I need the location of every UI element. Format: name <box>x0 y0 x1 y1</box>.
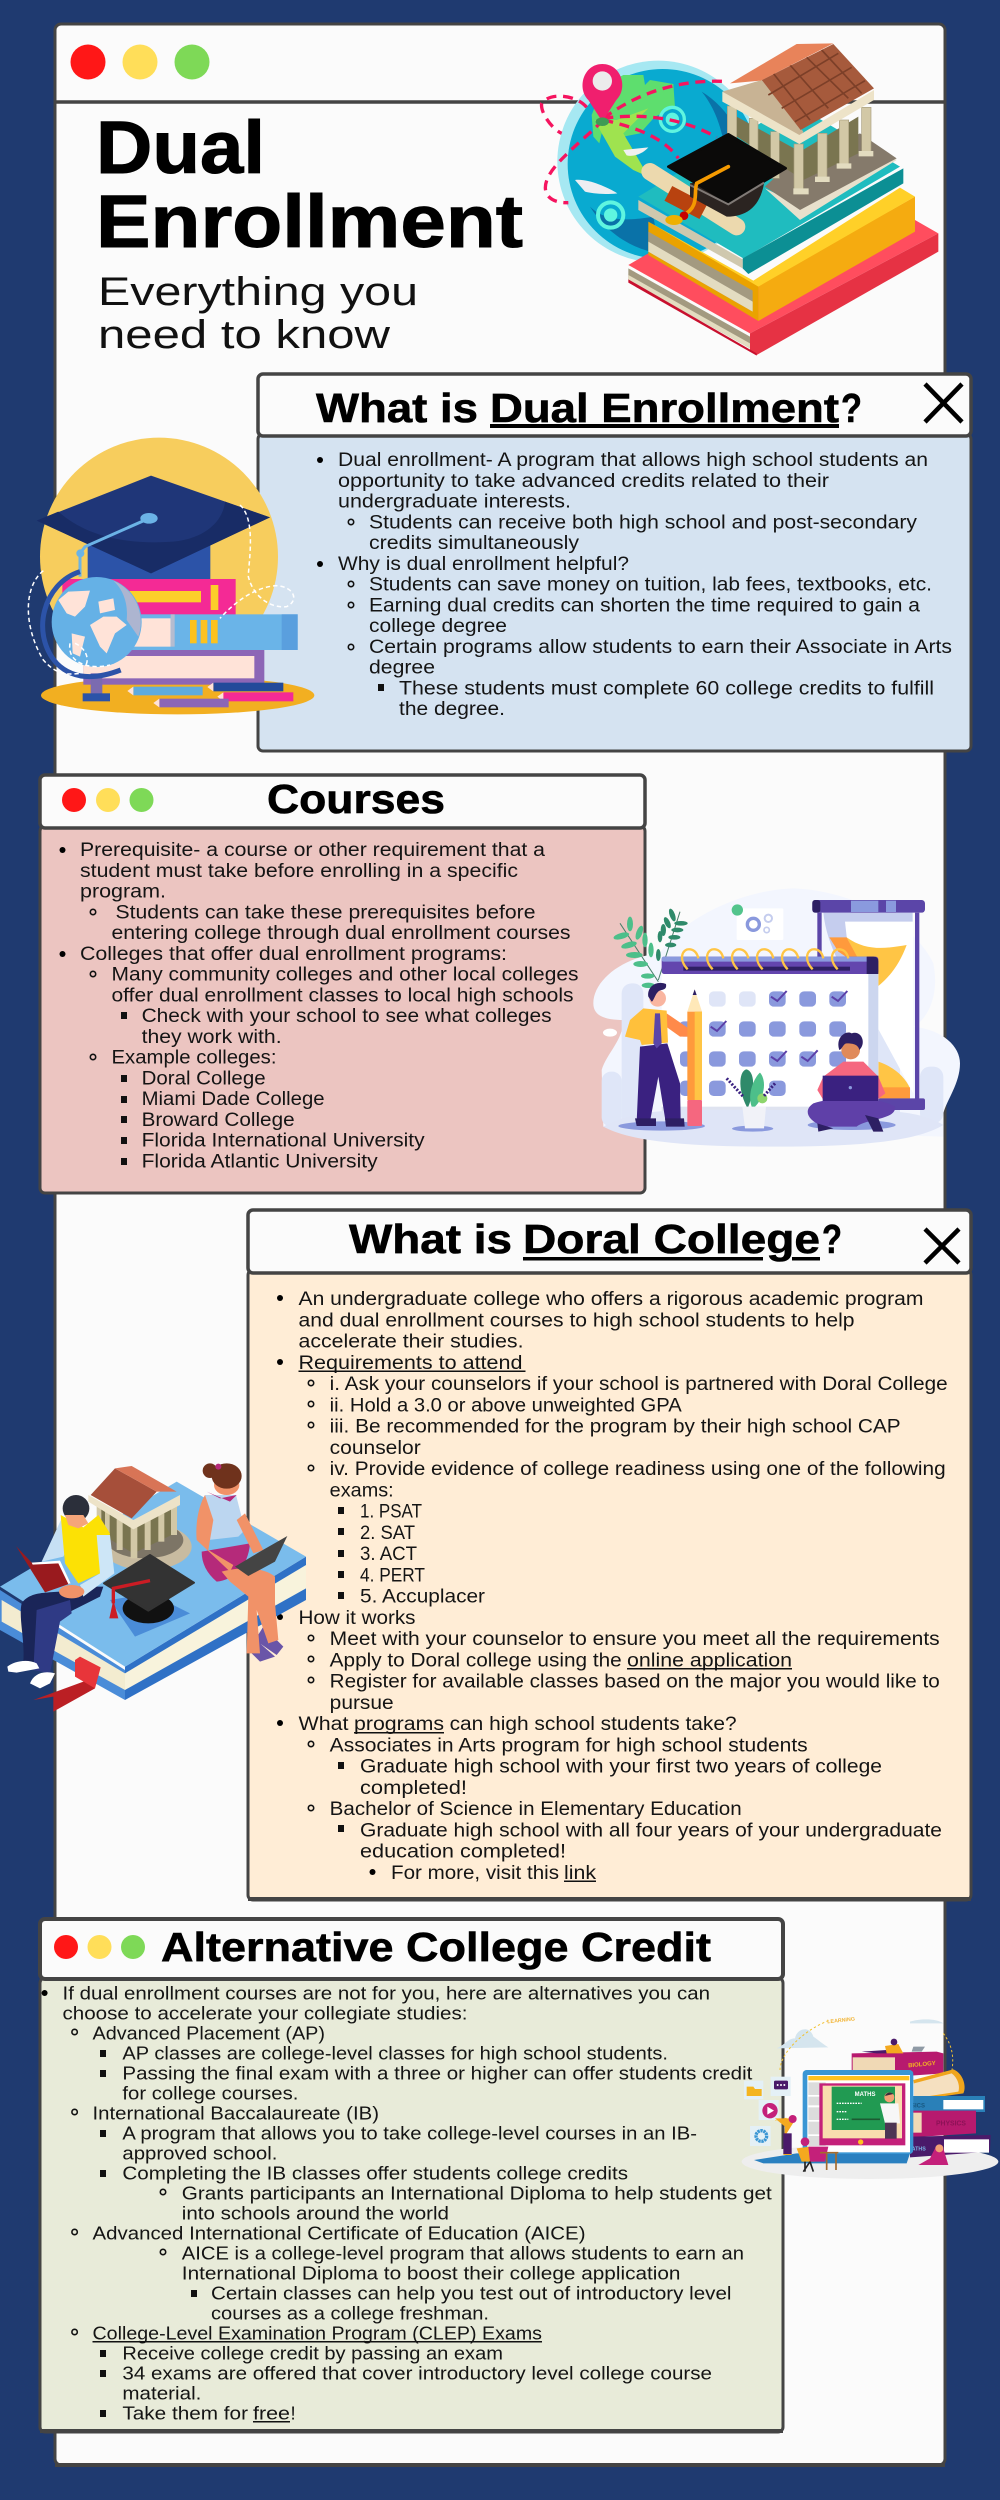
large book <box>0 1482 306 1700</box>
online learning label: LEARNING <box>827 2016 855 2025</box>
stacked books: PHYSICS <box>936 2118 966 2127</box>
heading box <box>40 1919 783 1979</box>
text block: alternatives: into schools around the world <box>182 2202 449 2223</box>
text block: doral college: What <box>298 1714 349 1735</box>
title <box>96 106 523 263</box>
bookmark <box>33 1657 101 1712</box>
heading box: Alternative College Credit <box>161 1924 711 1970</box>
text block: doral college: Graduate high school with all four years of your undergraduate <box>360 1820 942 1841</box>
text block: alternatives <box>42 1982 772 2423</box>
subtitle: Everything you <box>98 270 418 314</box>
window dots: courses <box>62 788 154 812</box>
text block: doral college <box>277 1289 948 1884</box>
illustration: students on a book <box>0 1463 306 1712</box>
heading box: Doral College <box>523 1216 820 1262</box>
dashed flight paths <box>28 505 294 674</box>
red book <box>628 220 938 356</box>
text block: courses: Broward College <box>142 1110 295 1131</box>
text block: courses: they work with. <box>142 1027 282 1048</box>
text block: doral college: i. Ask your counselors if your school is partnered with Doral College <box>330 1374 948 1395</box>
text block: doral college: programs <box>354 1714 444 1735</box>
panel: alternative college credit <box>40 1919 783 2433</box>
text block: doral college: For more, visit this <box>391 1863 559 1884</box>
dashed routes <box>542 81 728 203</box>
plant <box>613 908 688 988</box>
text block: doral college: Register for available classes based on the major you would like to <box>330 1672 940 1692</box>
window dots: hero <box>70 44 210 80</box>
teal book <box>638 103 903 274</box>
text block: courses: Florida Atlantic University <box>142 1151 378 1172</box>
graduation cap and diploma <box>650 134 786 227</box>
man reading <box>7 1495 114 1688</box>
text block: alternatives: AP classes are college-level classes for high school students. <box>122 2042 668 2063</box>
graduation cap <box>37 476 270 577</box>
text block: alternatives: free <box>253 2402 290 2423</box>
text block: dual enrollment: Students can receive both high school and post-secondary <box>369 512 918 533</box>
text block: doral college: can high school students take? <box>450 1714 737 1735</box>
text block: dual enrollment: Certain programs allow students to earn their Associate in Arts <box>369 637 952 658</box>
text block: alternatives: choose to accelerate your collegiate studies: <box>62 2002 467 2023</box>
clouds <box>777 2019 943 2048</box>
text block: alternatives: College-Level Examination Program (CLEP) Exams <box>92 2322 542 2343</box>
stacked books <box>852 2052 991 2157</box>
text block: doral college: counselor <box>330 1438 421 1459</box>
text block: alternatives: Advanced International Certificate of Education (AICE) <box>92 2222 586 2243</box>
panel: what is doral college <box>248 1210 971 1901</box>
subtitle: need to know <box>98 313 390 357</box>
text block: dual enrollment: college degree <box>369 616 507 637</box>
heading box: ? <box>841 385 862 431</box>
text block: courses: Doral College <box>142 1068 266 1089</box>
text block: alternatives: courses as a college freshman. <box>211 2302 489 2323</box>
location pin <box>583 64 622 126</box>
stacked books: ATHS <box>912 2147 926 2153</box>
panel: courses <box>40 775 645 1193</box>
text block: alternatives: Grants participants an International Diploma to help students get <box>182 2182 772 2203</box>
text block: dual enrollment: These students must complete 60 college credits to fulfill <box>399 678 934 699</box>
text block: alternatives: Take them for <box>122 2402 248 2423</box>
tiny figures <box>775 2039 948 2172</box>
yellow book <box>648 188 915 321</box>
text block: courses: Students can take these prerequisites before <box>116 902 536 923</box>
woman with laptop <box>196 1463 287 1662</box>
text block: alternatives: 34 exams are offered that cover introductory level college course <box>122 2362 712 2383</box>
text block: doral college: iv. Provide evidence of college readiness using one of the following <box>330 1459 946 1480</box>
text block: doral college: Apply to Doral college using the <box>330 1650 622 1671</box>
text block: dual enrollment: undergraduate interests. <box>338 492 571 512</box>
window dots: alternative <box>54 1935 145 1959</box>
heading box: Courses <box>267 776 445 822</box>
text block: doral college: education completed! <box>360 1842 566 1862</box>
text block: dual enrollment: Dual enrollment- A program that allows high school students an <box>338 450 928 471</box>
text block: doral college: Graduate high school with your first two years of college <box>360 1756 882 1778</box>
text block: doral college: Associates in Arts program for high school students <box>330 1735 808 1756</box>
text block: alternatives: Completing the IB classes offer students college credits <box>122 2162 628 2183</box>
text block: alternatives: Receive college credit by passing an exam <box>122 2342 503 2363</box>
text block: alternatives: A program that allows you to take college-level courses in an IB- <box>122 2122 697 2143</box>
text block: doral college: 2. SAT <box>360 1523 415 1544</box>
text block: doral college: and dual enrollment courses to high school students to help <box>298 1310 854 1331</box>
text block: doral college: Meet with your counselor to ensure you meet all the requirements <box>330 1629 940 1650</box>
panel: what is dual enrollment <box>258 374 971 751</box>
close icon <box>925 1229 959 1263</box>
small temple <box>88 1466 192 1570</box>
pencils <box>127 683 293 707</box>
text block: doral college: accelerate their studies. <box>298 1332 524 1352</box>
heading box: ? <box>822 1216 842 1262</box>
text block: alternatives: AICE is a college-level program that allows students to earn an <box>182 2242 744 2263</box>
temple <box>722 43 897 220</box>
stacked books: BIOLOGY <box>908 2061 936 2069</box>
illustration: online learning laptop and books <box>742 2016 998 2179</box>
text block: alternatives: Passing the final exam with a three or higher can offer students credit <box>122 2062 752 2083</box>
text block: dual enrollment: Students can save money on tuition, lab fees, textbooks, etc. <box>369 574 932 596</box>
heading box <box>258 374 971 436</box>
text block: doral college: exams: <box>330 1480 394 1501</box>
subtitle <box>98 270 418 357</box>
text block: courses <box>60 840 578 1172</box>
laptop <box>754 2070 913 2163</box>
text block: alternatives: Certain classes can help you test out of introductory level <box>211 2282 732 2303</box>
laptop: MATHS <box>855 2092 876 2098</box>
text block: courses: Example colleges: <box>112 1048 276 1068</box>
text block: doral college: How it works <box>298 1608 416 1629</box>
globe <box>557 61 759 263</box>
text block: doral college: pursue <box>330 1693 394 1714</box>
text block: doral college: 4. PERT <box>360 1565 425 1586</box>
man with pencil <box>625 983 702 1127</box>
desk globe <box>43 572 142 701</box>
pot plant <box>727 1069 775 1128</box>
hourglass <box>812 900 925 1110</box>
text block: doral college: link <box>564 1863 597 1884</box>
calendar <box>662 949 878 1117</box>
text block: doral college: completed! <box>360 1778 467 1799</box>
illustration: calendar with people <box>593 888 960 1147</box>
stacked books: SICS <box>911 2103 925 2109</box>
title: Dual <box>96 106 265 189</box>
text block: alternatives: material. <box>122 2382 201 2403</box>
text block: alternatives: approved school. <box>122 2142 277 2163</box>
text block: alternatives: ! <box>290 2402 296 2423</box>
text block: doral college: 1. PSAT <box>360 1502 422 1522</box>
text block: doral college: iii. Be recommended for the program by their high school CAP <box>330 1416 901 1438</box>
text block: dual enrollment: degree <box>369 658 435 678</box>
book stack <box>62 543 298 685</box>
text block: courses: Florida International University <box>142 1130 425 1152</box>
text block: courses: entering college through dual enrollment courses <box>112 923 570 944</box>
close icon <box>925 384 962 422</box>
text block: courses: Prerequisite- a course or other requirement that a <box>80 840 545 861</box>
heading box <box>40 775 645 828</box>
text block: courses: Colleges that offer dual enrollment programs: <box>80 944 507 965</box>
text block: dual enrollment: credits simultaneously <box>369 533 580 554</box>
text block: doral college: ii. Hold a 3.0 or above unweighted GPA <box>330 1395 682 1416</box>
text block: alternatives: International Baccalaureate (IB) <box>92 2102 379 2123</box>
text block: courses: Check with your school to see what colleges <box>142 1006 552 1027</box>
title: Enrollment <box>96 180 523 263</box>
text block: alternatives: If dual enrollment courses are not for you, here are alternatives you can <box>62 1982 710 2003</box>
text block: courses: student must take before enrolling in a specific <box>80 861 518 882</box>
heading box: Dual Enrollment <box>490 385 839 431</box>
background blob <box>593 888 960 1137</box>
text block: alternatives: International Diploma to boost their college application <box>182 2262 681 2283</box>
text block: dual enrollment <box>317 450 952 720</box>
text block: courses: offer dual enrollment classes to local high schools <box>112 985 574 1006</box>
heading box: What is <box>349 1216 512 1262</box>
text block: dual enrollment: the degree. <box>399 699 505 720</box>
text block: doral college: Bachelor of Science in Elementary Education <box>330 1799 742 1820</box>
hero illustration: globe, books, temple, cap <box>542 43 938 356</box>
heading box: What is <box>316 385 478 431</box>
text block: courses: program. <box>80 882 166 902</box>
text block: dual enrollment: Earning dual credits can shorten the time required to gain a <box>369 595 920 616</box>
floor <box>603 1110 943 1147</box>
gear card <box>732 904 783 940</box>
text block: doral college: 5. Accuplacer <box>360 1586 486 1608</box>
illustration: cap, globe and books <box>28 438 314 714</box>
text block: dual enrollment: opportunity to take advanced credits related to their <box>338 471 830 492</box>
text block: doral college: An undergraduate college who offers a rigorous academic program <box>298 1289 924 1310</box>
text block: doral college: online application <box>627 1650 792 1671</box>
text block: doral college: 3. ACT <box>360 1544 417 1565</box>
app icon cards <box>744 2077 791 2146</box>
heading box <box>248 1210 971 1273</box>
woman with laptop <box>808 1032 895 1132</box>
text block: courses: Many community colleges and other local colleges <box>112 964 578 986</box>
text block: dual enrollment: Why is dual enrollment helpful? <box>338 554 629 575</box>
text block: courses: Miami Dade College <box>142 1089 325 1110</box>
text block: alternatives: for college courses. <box>122 2082 298 2103</box>
text block: doral college: Requirements to attend <box>298 1353 522 1374</box>
graduation cap <box>104 1555 194 1623</box>
text block: alternatives: Advanced Placement (AP) <box>92 2022 325 2043</box>
